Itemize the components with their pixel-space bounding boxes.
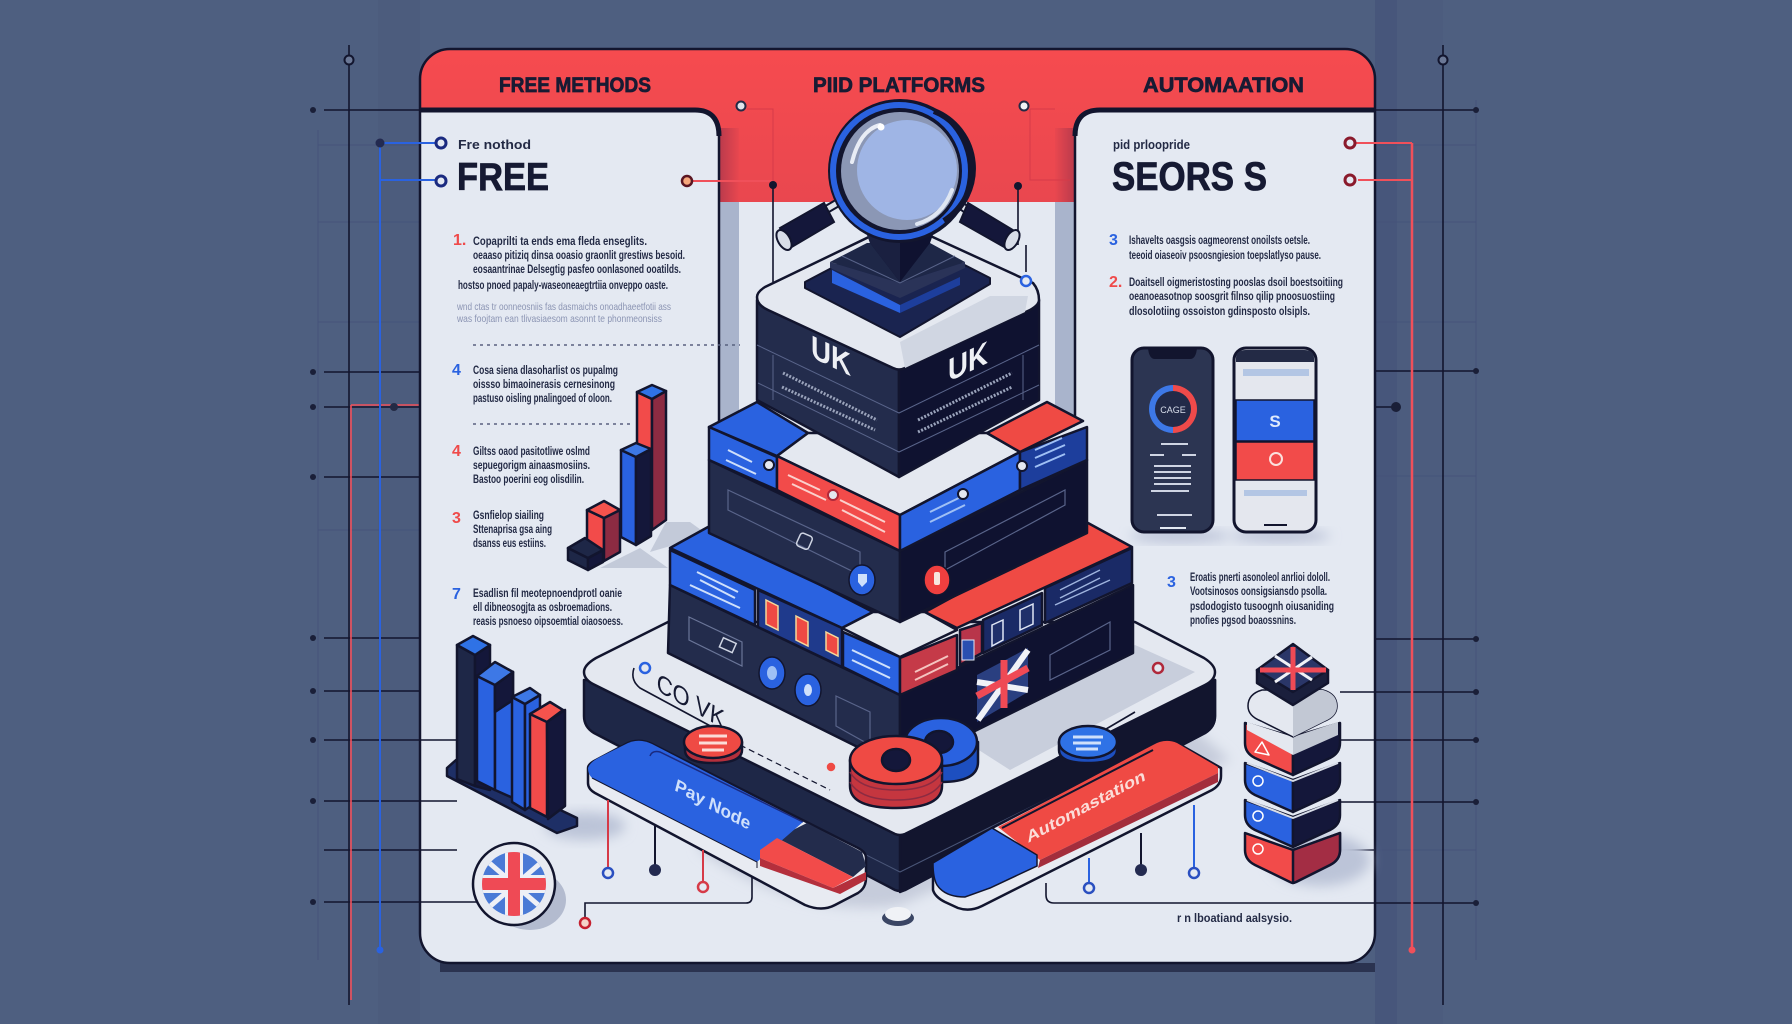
- second level: centre: [777, 433, 1020, 515]
- list item 5: ell dibneosogjta as osbroemadions.: [473, 602, 612, 614]
- header: free methods: FREE METHODS: [499, 74, 651, 97]
- bar: pay node: [588, 741, 866, 908]
- list item 4: dsanss eus estiins.: [473, 538, 546, 550]
- stack layer: flag top: [1257, 644, 1328, 705]
- second level: right red end: [987, 402, 1083, 452]
- pedestal: [805, 232, 990, 337]
- third level: right red surface: [925, 523, 1132, 628]
- list item 3: Vootsinosos oonsigsiansdo psolla.: [1190, 586, 1327, 598]
- list item 1: oeaaso pitiziq dinsa ooasio graonlit grestiws besoid.: [473, 250, 685, 262]
- list item 4: Gsnfielop siailing: [473, 510, 544, 522]
- list item 3: 4: [452, 443, 461, 460]
- list item 1: 1.: [453, 232, 466, 249]
- list item 2: oeanoeasotnop soosgrit filnso qilip pnoosuostiing: [1129, 291, 1335, 303]
- phone: dark with ring chart: [1130, 348, 1230, 542]
- frame outline and panel connectors: [376, 49, 1412, 963]
- stack glyphs: [1253, 742, 1269, 854]
- small heading: pid prloopride: [1113, 137, 1190, 152]
- list item 3: Giltss oaod pasitotliwe oslmd: [473, 446, 590, 458]
- guide lines: right margin: [1375, 45, 1479, 1005]
- third level: stickers: [689, 570, 1110, 745]
- marker dot: [826, 762, 836, 772]
- list item 1: teeoid oiaseoiv psoosngiesion toepslatlyso pause.: [1129, 250, 1321, 262]
- icon: magnifying glass: [773, 99, 1023, 253]
- footnote: r n lboatiand aalsysio.: [1177, 913, 1292, 925]
- list item 3: sepuegorigm ainaasmosiins.: [473, 460, 590, 472]
- panel: paid platforms: [1075, 110, 1375, 963]
- second level: left blue end: [709, 402, 808, 456]
- list item 2: oissso bimaoinerasis cernesinong: [473, 379, 615, 391]
- tier: top block: [757, 222, 1039, 477]
- connector pins: right bar: [1046, 805, 1199, 903]
- list item 5: [452, 586, 623, 628]
- list item 3: [1167, 572, 1334, 627]
- panel: free methods: [420, 110, 740, 963]
- bar chart: lower: [447, 636, 625, 840]
- stack layer: red and white: [1245, 722, 1340, 775]
- list item 1: [1109, 232, 1321, 262]
- third level: centre cap: [842, 612, 957, 657]
- list item 2: dlosolotiing ossoiston gdinsposto olsipls.: [1129, 306, 1310, 318]
- bar chart: upper: [568, 385, 708, 570]
- label: co uk: CO VK: [655, 668, 726, 735]
- list item 5: reasis psnoeso oipsoemtial oiaosoess.: [473, 616, 623, 628]
- list item 2: [1109, 274, 1343, 318]
- list item 5: Esadlisn fil meotepnoendprotl oanie: [473, 588, 622, 600]
- header: paid platforms: PIID PLATFORMS: [813, 74, 985, 97]
- list item 2: pastuso oisling pnalingoed of oloon.: [473, 393, 612, 405]
- second level: stickers: [726, 438, 1065, 595]
- header: automation: AUTOMAATION: [1143, 74, 1304, 97]
- stack layer: blue upper: [1245, 763, 1340, 812]
- list item 3: pnofies pgsod boaossnins.: [1190, 615, 1296, 627]
- label: pay node: Pay Node: [673, 775, 753, 834]
- list item 1: Copaprilti ta ends ema fleda enseglits.: [473, 236, 647, 248]
- stack layer: white: [1248, 690, 1337, 737]
- list item 3: 3: [1167, 574, 1176, 591]
- stack layer: blue lower: [1245, 800, 1340, 847]
- list item 2: Cosa siena dlasoharlist os pupalmg: [473, 365, 618, 377]
- big heading: FREE: [457, 156, 549, 199]
- list item 1: hostso pnoed papaly-waseoneaegtrtiia onveppo oaste.: [458, 280, 668, 292]
- third level: left blue surface: [670, 527, 873, 628]
- disc stack: red: [850, 736, 942, 808]
- guide lines: left margin: [310, 45, 420, 1005]
- tier: second level: [709, 402, 1087, 622]
- list item 2: 4: [452, 362, 461, 379]
- big heading: SEORS S: [1112, 155, 1267, 199]
- list item 3: Bastoo poerini eog olisdilin.: [473, 474, 584, 486]
- list item 1: eosaantrinae Delsegtig pasfeo oonlasoned ooatilds.: [473, 264, 681, 276]
- phone: light with colored bands: [1230, 348, 1330, 542]
- list item 1: wnd ctas tr oonneosniis fas dasmaichs onoadhaeetfotii ass: [456, 301, 671, 313]
- icon: union flag on base: [977, 648, 1028, 722]
- icon: union flag badge: [473, 843, 566, 930]
- label: uk right face: UK: [948, 334, 988, 390]
- connector lines: centre: [736, 102, 1070, 286]
- pyramid: [580, 99, 1230, 928]
- list item 4: Sttenaprisa gsa aing: [473, 524, 552, 536]
- list item 1: 3: [1109, 232, 1118, 249]
- list item 5: 7: [452, 586, 461, 603]
- tier: base platform: [584, 622, 1230, 908]
- list item 1: Ishavelts oasgsis oagmeorenst onoilsts oetsle.: [1129, 235, 1310, 247]
- disc stack: blue: [905, 718, 978, 782]
- list item 1: [453, 232, 685, 325]
- button: blue: [1059, 726, 1117, 763]
- bar: automation: [933, 741, 1221, 910]
- list item 2: 2.: [1109, 274, 1122, 291]
- phone: dark with ring chart: CAGE: [1160, 405, 1186, 415]
- list item 2: [452, 362, 618, 405]
- small bump: [882, 907, 914, 926]
- list item 3: psdodogisto tusoognh oiusaniding: [1190, 601, 1334, 613]
- icon stack: right column: [1245, 644, 1370, 886]
- phones: [1130, 348, 1330, 542]
- stack layer: red: [1245, 833, 1340, 883]
- list item 2: Doaitsell oigmeristosting pooslas dsoil boestsoitiing: [1129, 277, 1343, 289]
- list item 3: [452, 443, 590, 486]
- label: uk left face: UK: [811, 329, 851, 384]
- list item 1: was foojtam ean tlivasiaesom asonnt te phonmeonsiss: [456, 313, 662, 325]
- tier: third level: [668, 523, 1133, 768]
- small heading: Fre nothod: [458, 137, 531, 152]
- phone: light with colored bands: S: [1269, 412, 1281, 431]
- list item 4: 3: [452, 510, 461, 527]
- connector pins: left bar: [580, 800, 752, 928]
- list item 4: [452, 510, 552, 550]
- main frame: [420, 49, 1375, 963]
- list item 3: Eroatis pnerti asonoleol anrlioi dololl.: [1190, 572, 1330, 584]
- button: red: [684, 726, 742, 763]
- label: automation: Automastation: [1025, 767, 1147, 847]
